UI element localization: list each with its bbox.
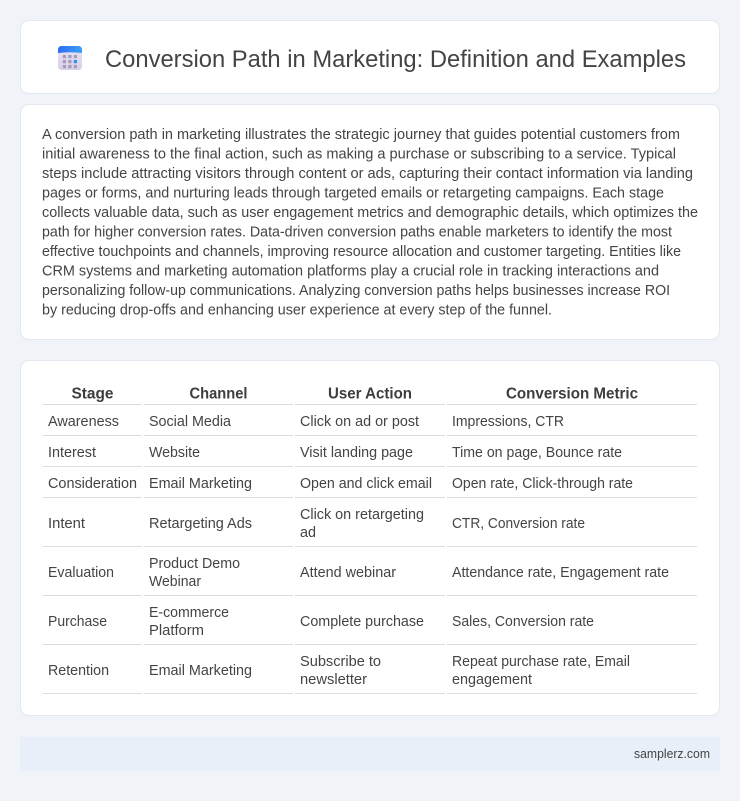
table row: Retention: newsletter: [300, 672, 367, 688]
table row: Intent: [48, 507, 585, 541]
icon: calendar: [58, 46, 82, 70]
table row: Evaluation: Product Demo: [149, 556, 240, 572]
table row: Intent: CTR, Conversion rate: [452, 516, 585, 532]
table row: Retention: Subscribe to: [300, 654, 381, 670]
text block: description paragraph: effective touchpoints and channels, improving resource allocation and customer targeting. Entities like: [42, 244, 681, 260]
text block: description paragraph: [42, 127, 698, 318]
footer bar: [20, 737, 720, 771]
title: Conversion Path in Marketing: Definition and Examples: [105, 46, 686, 73]
table row: Intent: Intent: [48, 516, 85, 532]
table row: Retention: Retention: [48, 663, 109, 679]
text block: description paragraph: initial awareness to the final action, such as making a purchase or subscribing to a service. Typical: [42, 146, 676, 162]
table row: Retention: engagement: [452, 672, 532, 688]
table row: Interest: Time on page, Bounce rate: [452, 445, 622, 461]
table row: Purchase: [48, 605, 594, 639]
table row: Consideration: [48, 476, 633, 492]
table row: Awareness: Impressions, CTR: [452, 414, 564, 430]
table row: Awareness: Click on ad or post: [300, 414, 419, 430]
table row: Retention: [48, 654, 630, 688]
table header: [72, 386, 638, 402]
table header: User Action: [328, 386, 412, 402]
table row: Retention: Email Marketing: [149, 663, 252, 679]
table row: Consideration: Consideration: [48, 476, 137, 492]
table row: Purchase: Platform: [149, 623, 204, 639]
table header: Stage: [72, 386, 114, 402]
table row: Evaluation: Webinar: [149, 574, 201, 590]
text block: description paragraph: A conversion path in marketing illustrates the strategic journey that guides potential customers from: [42, 127, 680, 143]
panel: title card: [20, 20, 720, 94]
panel: table card: [20, 360, 720, 716]
table row: Purchase: E-commerce: [149, 605, 229, 621]
table row: Evaluation: Evaluation: [48, 565, 114, 581]
table row: Consideration: Email Marketing: [149, 476, 252, 492]
table header: Conversion Metric: [506, 386, 638, 402]
table row: Intent: ad: [300, 525, 316, 541]
table row: Intent: Click on retargeting: [300, 507, 424, 523]
table row: Awareness: [48, 414, 564, 430]
table row: Interest: [48, 445, 622, 461]
table row: Interest: Interest: [48, 445, 96, 461]
table row: Interest: Visit landing page: [300, 445, 413, 461]
table row: Purchase: Sales, Conversion rate: [452, 614, 594, 630]
table row: Intent: Retargeting Ads: [149, 516, 252, 532]
table row: Awareness: Social Media: [149, 414, 231, 430]
table row: Evaluation: [48, 556, 669, 590]
table row: Purchase: Complete purchase: [300, 614, 424, 630]
table row: Evaluation: Attendance rate, Engagement rate: [452, 565, 669, 581]
panel: description: [20, 104, 720, 340]
table row: Retention: Repeat purchase rate, Email: [452, 654, 630, 670]
text block: description paragraph: path for higher conversion rates. Data-driven conversion paths enable marketers to identify the most: [42, 224, 672, 240]
text block: description paragraph: pages or forms, and nurturing leads through targeted emails or retargeting campaigns. Each stage: [42, 186, 664, 202]
text block: description paragraph: by reducing drop-offs and enhancing user experience at every step of the funnel.: [42, 302, 552, 318]
text block: description paragraph: personalizing follow-up communications. Analyzing conversion paths helps businesses increase ROI: [42, 283, 670, 299]
table row: Consideration: Open rate, Click-through rate: [452, 476, 633, 492]
footer text: samplerz.com: [634, 746, 710, 761]
text block: description paragraph: collects valuable data, such as user engagement metrics and demographic details, which optimizes the: [42, 205, 698, 221]
table header: Channel: [190, 386, 248, 402]
table row: Interest: Website: [149, 445, 200, 461]
table row: Evaluation: Attend webinar: [300, 565, 396, 581]
text block: description paragraph: CRM systems and marketing automation platforms play a crucial role in tracking interactions and: [42, 264, 659, 280]
table row: Consideration: Open and click email: [300, 476, 432, 492]
text block: description paragraph: steps include attracting visitors through content or ads, capturing their contact information via landing: [42, 166, 693, 182]
table row: Purchase: Purchase: [48, 614, 107, 630]
table row: Awareness: Awareness: [48, 414, 119, 430]
